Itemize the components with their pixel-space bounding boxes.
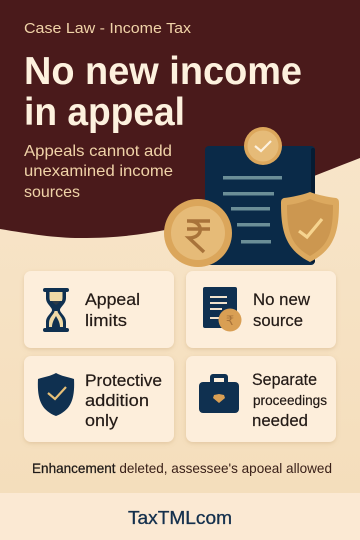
label: [85, 290, 140, 330]
label: limits: [85, 311, 127, 330]
label: No new: [253, 290, 311, 309]
label: [252, 370, 327, 430]
subtitle: unexamined income: [24, 163, 173, 180]
subtitle: Appeals cannot add: [24, 143, 172, 160]
subtitle: sources: [24, 184, 80, 201]
label: source: [253, 311, 303, 330]
title: No new income: [24, 50, 302, 93]
label: [85, 371, 162, 430]
label: Protective: [85, 371, 162, 390]
footer: [0, 493, 360, 540]
icon: document with rupee coin: [203, 287, 242, 332]
eyebrow: Case Law - Income Tax: [24, 20, 192, 37]
label: addition: [85, 391, 149, 410]
check coin: [244, 127, 282, 165]
shield: [281, 192, 339, 262]
brand: TaxTMLcom: [128, 508, 232, 528]
conclusion: Enhancement deleted, assessee's apoeal allowed: [32, 460, 332, 476]
icon: shield: [38, 373, 74, 416]
card: no new source: [186, 271, 336, 348]
label: only: [85, 411, 119, 430]
icon: document with rupee coin: ₹: [226, 313, 234, 328]
title: in appeal: [24, 91, 185, 134]
card: separate proceedings needed: [186, 356, 336, 442]
icon: briefcase: [199, 374, 239, 413]
label: needed: [252, 411, 308, 430]
label: [253, 290, 311, 330]
rupee coin: [164, 199, 232, 267]
card: appeal limits: [24, 271, 174, 348]
label: Separate: [252, 370, 317, 389]
label: proceedings: [253, 393, 327, 408]
label: Appeal: [85, 290, 140, 309]
header wave: [0, 0, 360, 238]
document: [205, 146, 315, 265]
icon: hourglass: [43, 288, 69, 332]
hero illustration: [164, 127, 339, 267]
title: [24, 50, 302, 134]
card: protective addition only: [24, 356, 174, 442]
subtitle: [24, 143, 173, 201]
